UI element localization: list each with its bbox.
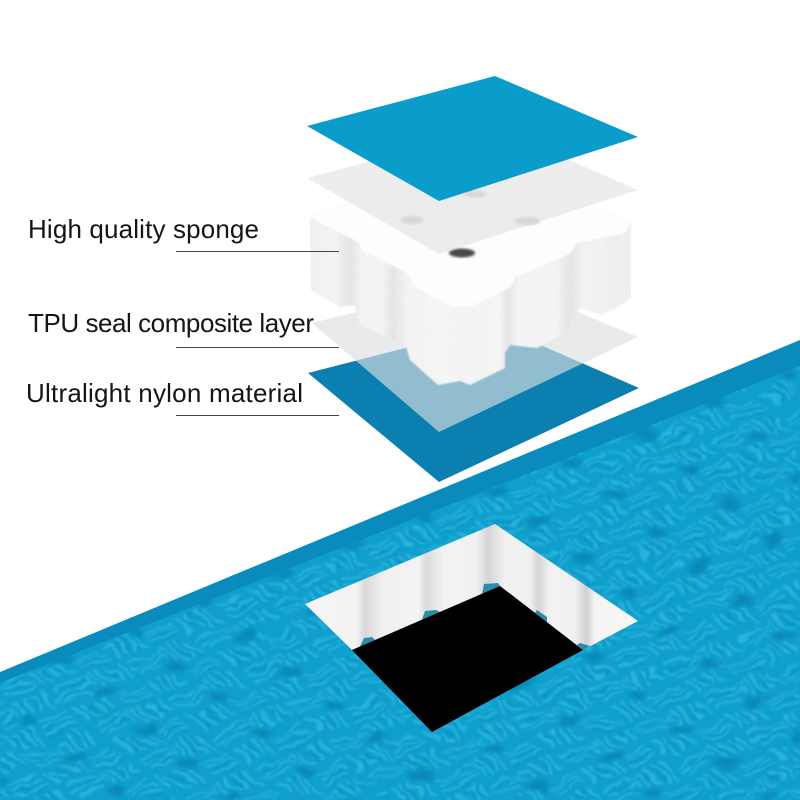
lower TPU film <box>312 278 638 432</box>
label: Ultralight nylon material: Ultralight nylon material <box>26 378 303 408</box>
top nylon layer <box>307 76 638 201</box>
mat quilted surface <box>0 340 800 800</box>
sponge top surface <box>310 172 631 307</box>
mat edge strip <box>0 340 800 684</box>
upper TPU film <box>307 128 638 254</box>
label: TPU seal composite layer: TPU seal composite layer <box>28 308 314 338</box>
cut-away black inner layer <box>352 586 583 732</box>
label: High quality sponge: High quality sponge <box>28 214 259 244</box>
cut-away foam walls <box>305 524 638 650</box>
sleeping mat with cut-away window <box>0 340 800 800</box>
white sponge block <box>310 190 631 386</box>
sponge vent holes <box>400 190 540 258</box>
bottom nylon layer <box>308 325 639 482</box>
